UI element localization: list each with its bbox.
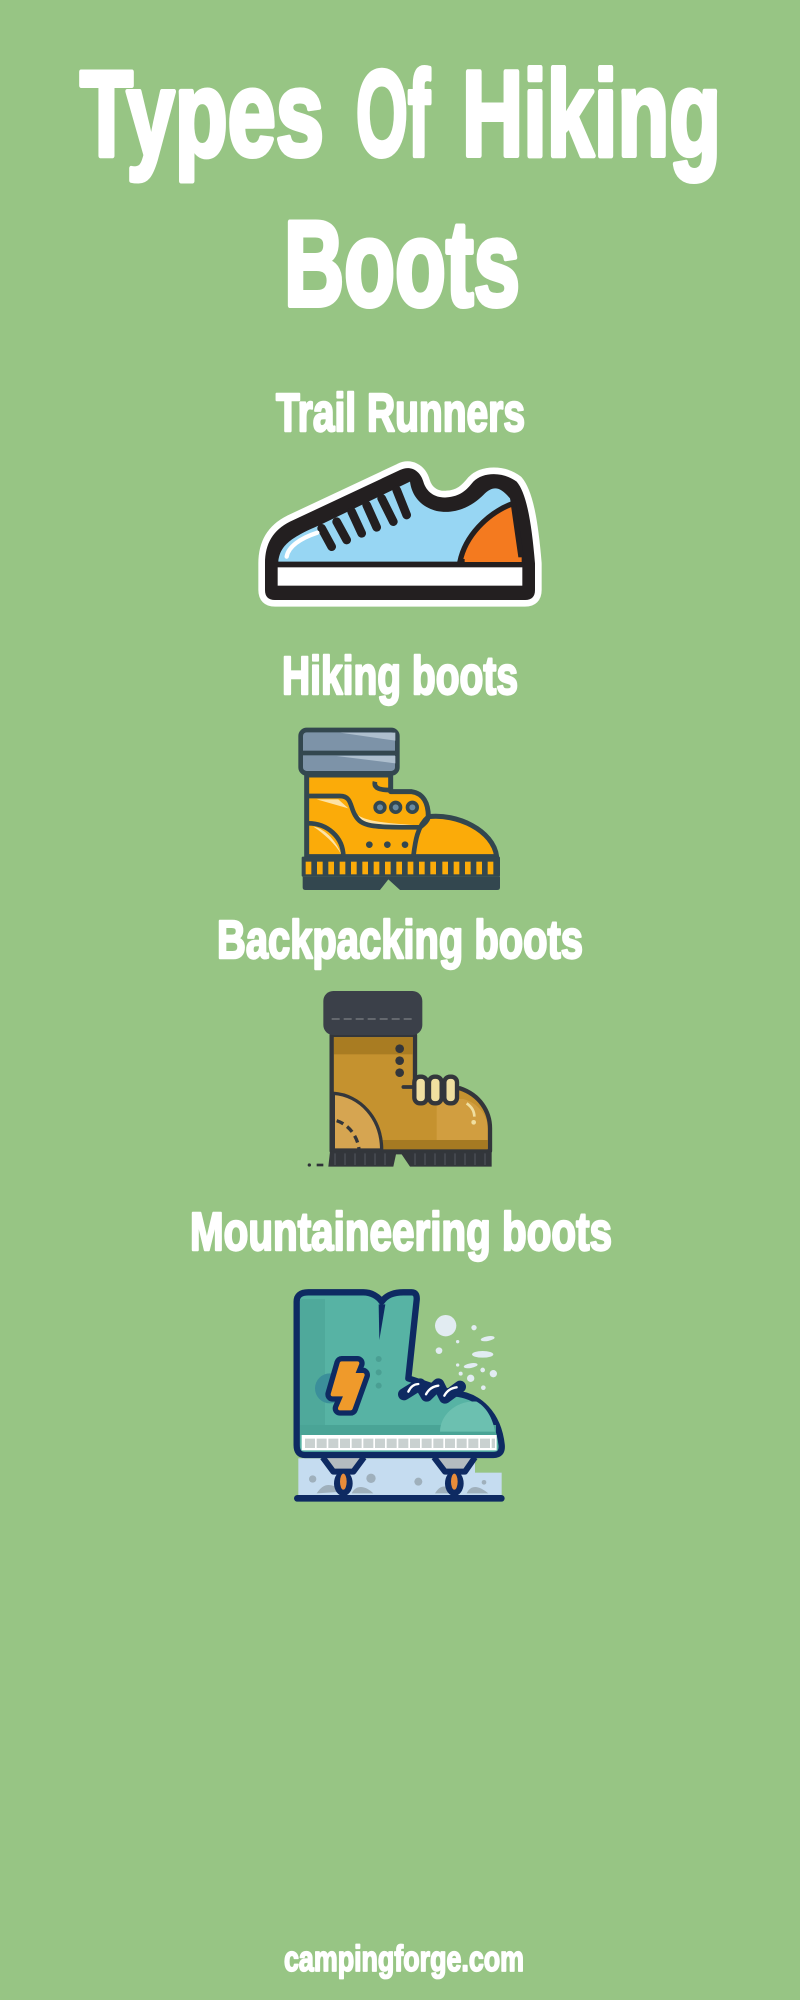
heading: Mountaineering boots: Mountaineering boots <box>190 1202 612 1262</box>
icon: backpacking boot <box>308 991 492 1167</box>
icon: trail runner shoe <box>265 468 535 600</box>
icon: mountaineering boot <box>297 1292 505 1498</box>
icon: hiking boot <box>301 730 500 890</box>
footer: website: campingforge.com <box>284 1938 524 1979</box>
title: Of <box>356 46 430 182</box>
heading: Hiking boots: Hiking boots <box>282 646 518 706</box>
heading: Trail Runners: Trail Runners <box>276 383 525 443</box>
title: Boots <box>284 196 520 332</box>
heading: Backpacking boots: Backpacking boots <box>217 910 583 970</box>
title <box>80 46 721 332</box>
title: Types <box>80 46 324 182</box>
